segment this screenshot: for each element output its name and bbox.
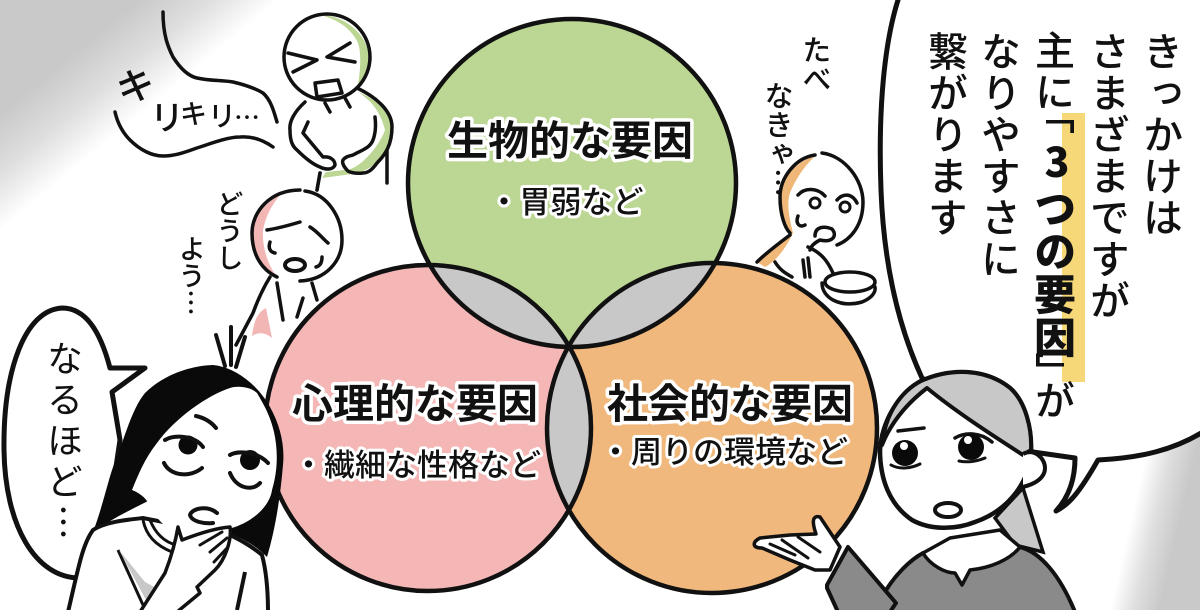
speech bubble: naruhodo [4, 308, 145, 578]
fingers [770, 537, 820, 558]
arm line [237, 572, 245, 610]
overlap: green and pink [434, 267, 566, 344]
kirikiri text [110, 52, 260, 140]
head [252, 190, 342, 281]
kirikiri text: キ [180, 93, 207, 132]
figure: worried (pink) [236, 173, 342, 345]
ponytail [995, 488, 1043, 552]
overlap: green and orange [572, 265, 712, 345]
highlight band [1062, 113, 1085, 382]
circle: biological [408, 19, 736, 347]
body [68, 518, 268, 610]
body and arm [757, 235, 833, 277]
hand [140, 527, 230, 610]
sad face [267, 222, 328, 267]
explanation text [919, 30, 1192, 422]
label: social factor [600, 370, 853, 472]
label: biological factor [447, 107, 693, 222]
eyes [164, 436, 268, 488]
circle: social [547, 263, 877, 593]
hand [754, 517, 840, 570]
surprise marks [216, 327, 245, 367]
explanation text: 主に [1026, 30, 1084, 113]
speech: tabenakya [758, 35, 838, 197]
bowl [825, 272, 875, 292]
collar [923, 530, 1020, 585]
eyes [891, 434, 985, 468]
explanation text: なりやすさに [972, 31, 1030, 280]
vignette: top left corner [0, 0, 400, 320]
speech bubble: explanation [880, 0, 1200, 511]
explanation text: 3 [1045, 129, 1069, 189]
orange shading [757, 156, 815, 267]
label: psychological factor [292, 370, 541, 485]
green shading [320, 15, 391, 178]
ear [1023, 452, 1045, 487]
speech: tabenakya: なきゃ… [758, 81, 800, 197]
explanation text: 繋がります [919, 31, 977, 238]
mouth [935, 503, 961, 517]
label: psychological factor: ・繊細な性格など [293, 440, 541, 485]
fingers [200, 532, 228, 562]
label: biological factor: 生物的な要因 [447, 107, 693, 167]
body and arms [290, 88, 392, 190]
circle outlines [265, 19, 877, 593]
eyebrows [898, 428, 992, 442]
explanation text: 」 [1026, 352, 1084, 394]
explanation text: さまざまですが [1081, 31, 1139, 322]
pink shading [252, 195, 280, 277]
torso [885, 547, 1075, 610]
woman explaining [754, 372, 1075, 610]
figure: must eat (orange) [757, 153, 875, 304]
sleeve [827, 547, 896, 610]
label: psychological factor: 心理的な要因 [292, 370, 538, 430]
speech: doushiyou: どうし [210, 190, 250, 271]
venn diagram [265, 19, 877, 593]
kirikiri text: リ [208, 95, 236, 135]
explanation text: つの要因 [1024, 187, 1086, 359]
head [880, 372, 1031, 528]
explanation text: が [1026, 380, 1084, 422]
bubble outline [4, 308, 145, 578]
shirt shading [119, 550, 160, 600]
woman listening [68, 327, 283, 610]
kirikiri text: … [234, 98, 260, 135]
kirikiri text: リ [150, 91, 184, 140]
head [780, 153, 863, 245]
body [236, 277, 317, 345]
vignette: bottom right corner [1000, 400, 1200, 610]
label: social factor: 社会的な要因 [607, 370, 853, 430]
overlap: pink and orange [549, 350, 589, 506]
speech: doushiyou: よう… [172, 235, 212, 316]
explanation text: きっかけは [1134, 31, 1192, 238]
head [284, 14, 370, 100]
naruhodo text: なるほど… [39, 340, 91, 545]
face [132, 387, 277, 533]
eyebrow [196, 416, 216, 428]
bubble outline [880, 0, 1200, 511]
kirikiri text: キ [110, 52, 160, 115]
circle: psychological [265, 265, 591, 591]
label: biological factor: ・胃弱など [488, 177, 644, 222]
hair [93, 365, 283, 557]
label: social factor: ・周りの環境など [600, 427, 848, 472]
speech: tabenakya: たべ [796, 35, 838, 93]
closed eyes [288, 43, 355, 72]
explanation text: 「 [1026, 94, 1084, 136]
speech: doushiyou [172, 190, 250, 316]
hair cap [882, 372, 1031, 455]
face [797, 189, 857, 226]
speech: kirikiri [110, 12, 277, 156]
bubble lines [115, 12, 277, 156]
collar [118, 520, 176, 605]
figure: stomach pain (green) [284, 14, 392, 190]
mouth [315, 80, 342, 97]
mouth [190, 508, 217, 523]
